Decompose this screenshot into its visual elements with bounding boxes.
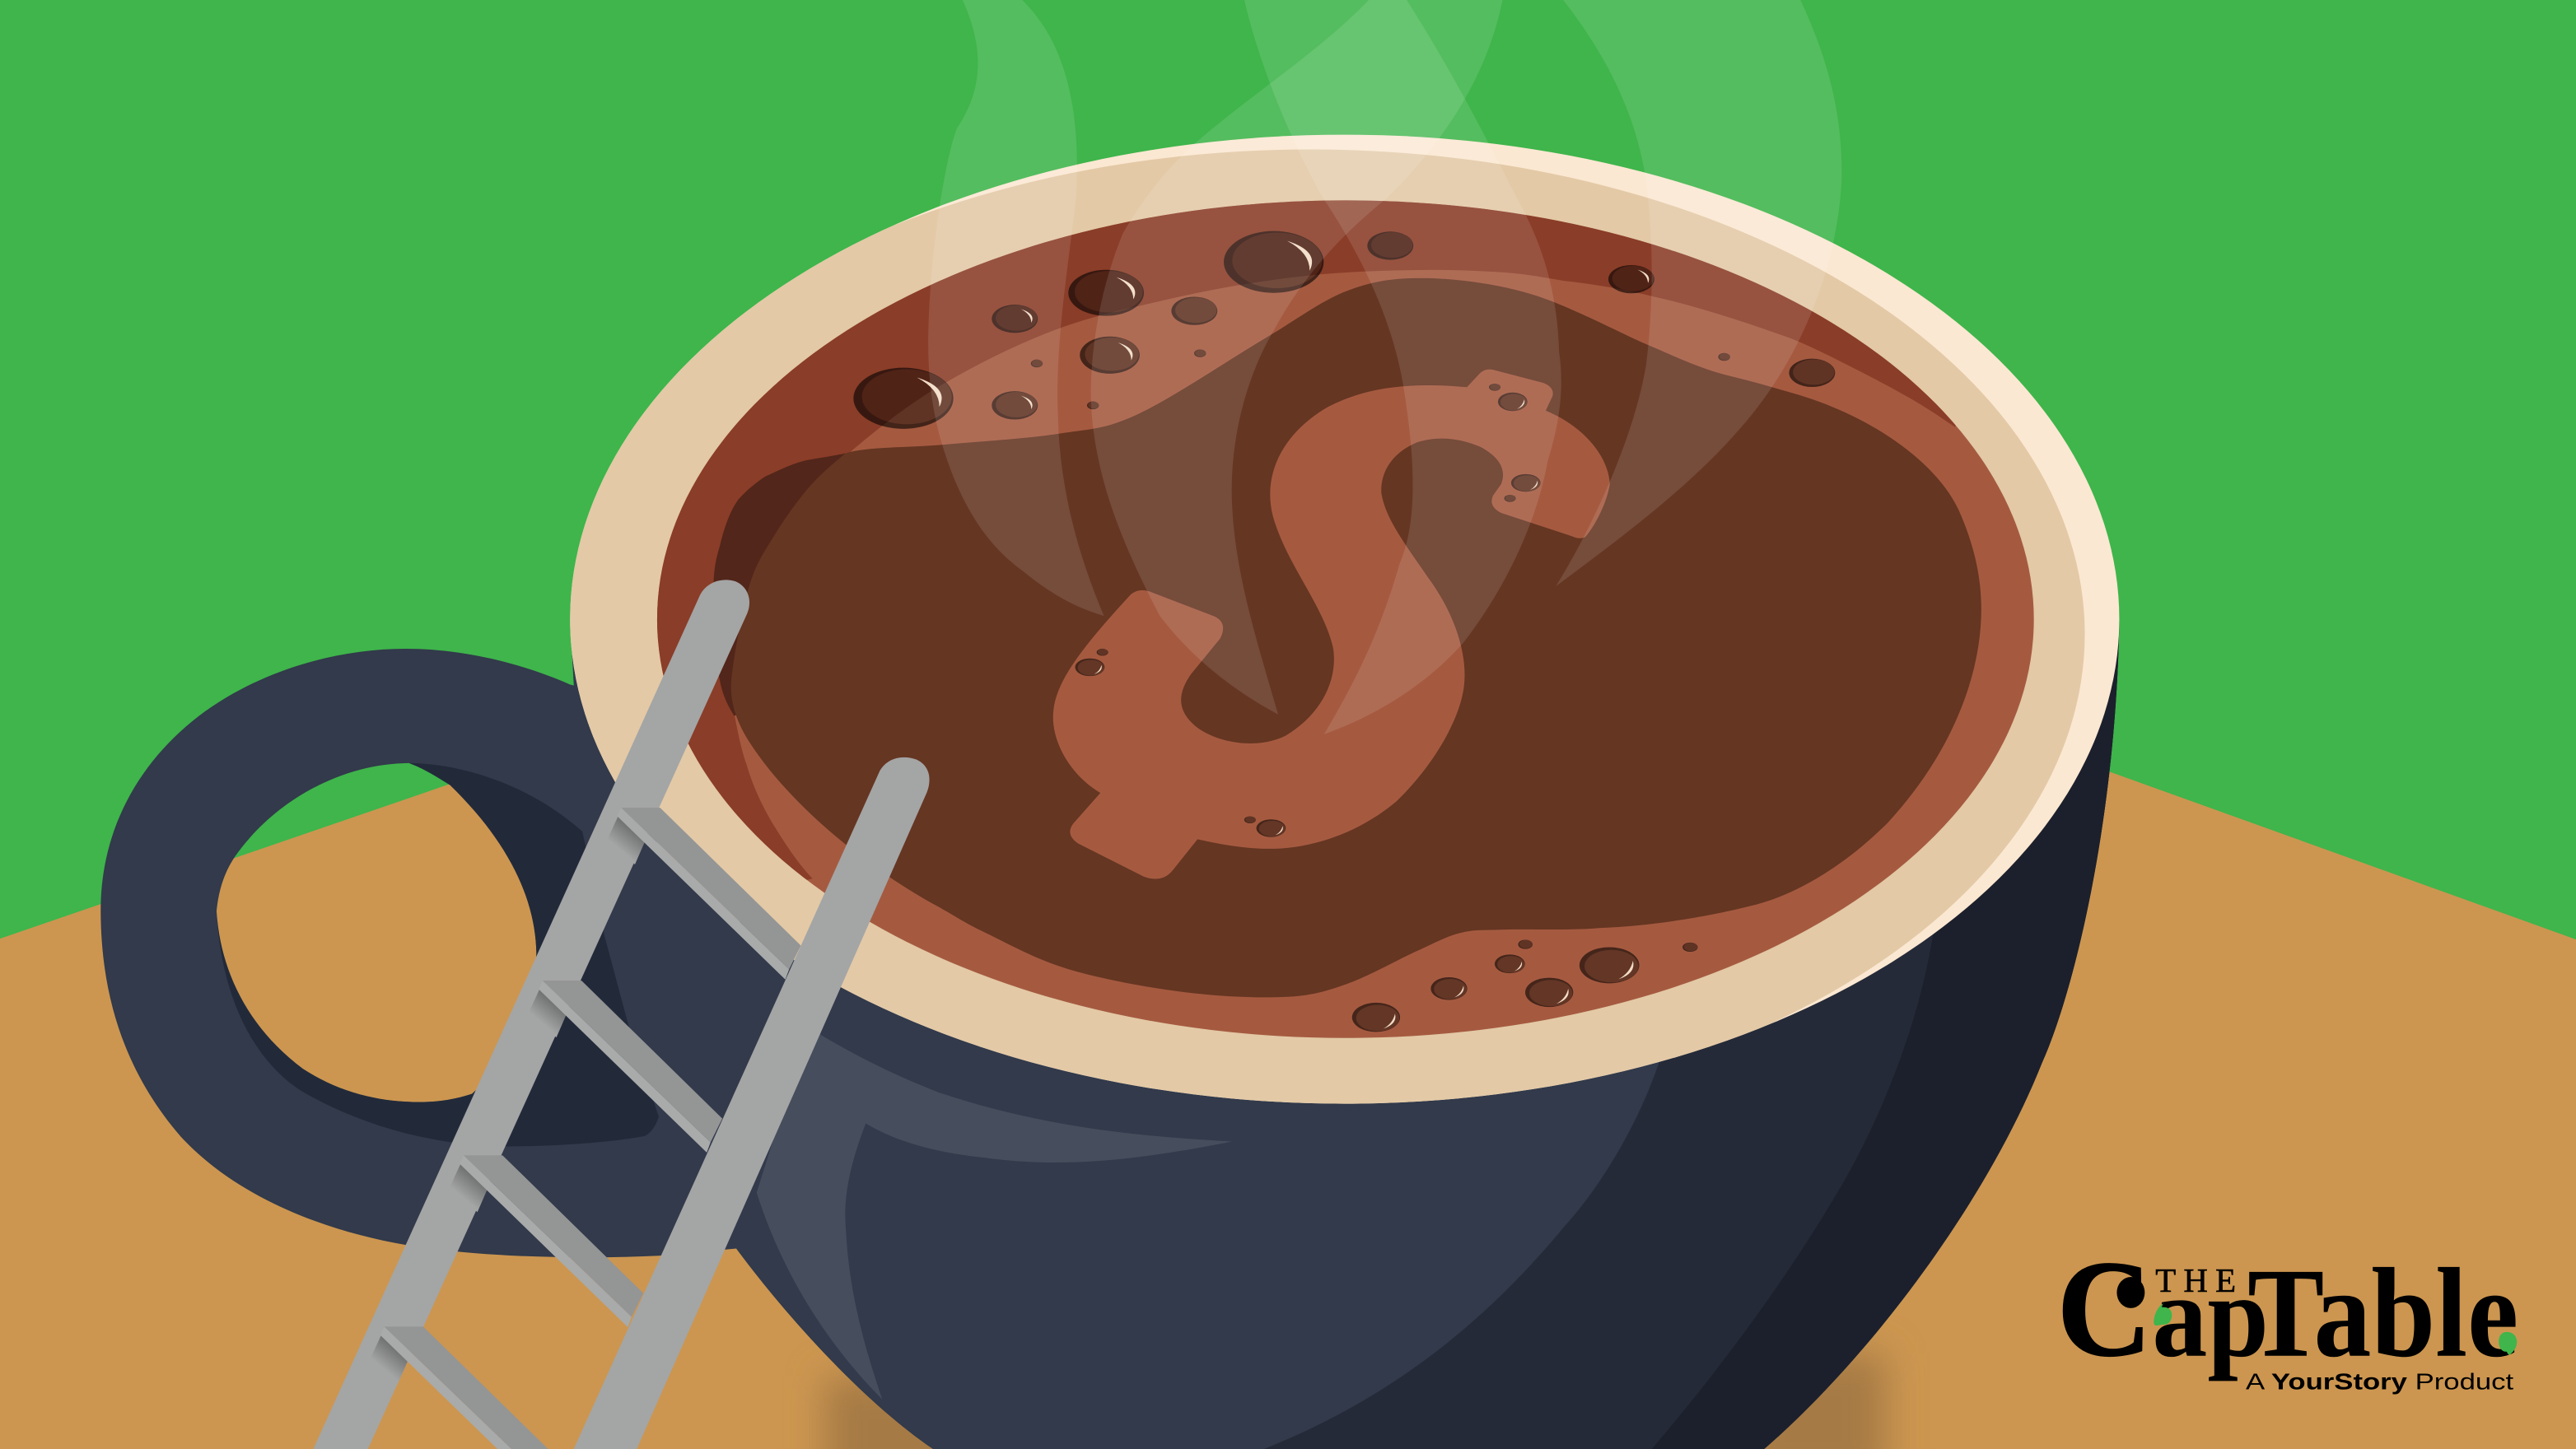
- steam centre right: [1244, 0, 1561, 734]
- cup handle: [100, 649, 821, 1257]
- cup rim inner: [535, 150, 2085, 1119]
- cup body shading: [1257, 624, 2135, 1449]
- dollar shape: [1053, 370, 1610, 879]
- logo wordmark: C: [2057, 1233, 2152, 1386]
- logo green accent upper: [2154, 1303, 2172, 1326]
- bubbles on dollar: [1076, 384, 1541, 837]
- coffee dark centre: [731, 278, 1981, 997]
- coffee dark upper band: [657, 200, 1956, 880]
- table surface: [0, 657, 2576, 1449]
- bubbles at bottom of coffee: [1352, 939, 1698, 1032]
- logo wordmark: ap: [2152, 1251, 2269, 1382]
- dollar sign: [1053, 370, 1610, 879]
- logo small THE: THE: [2155, 1262, 2236, 1299]
- steam wisps: [928, 0, 1841, 734]
- steam left: [928, 0, 1104, 616]
- cup body: [570, 621, 2119, 1449]
- ladder rungs: [371, 808, 800, 1449]
- logo tagline: A YourStory Product: [2246, 1369, 2513, 1395]
- logo: The CapTable, A YourStory Product: [2057, 1233, 2518, 1395]
- ladder: [311, 580, 930, 1449]
- coffee cup: [100, 135, 2135, 1449]
- ladder left rail: [311, 580, 749, 1449]
- cup shadow on table: [824, 1353, 1886, 1449]
- cup highlight: [731, 976, 1232, 1400]
- coffee base: [641, 180, 2054, 1051]
- cup rim outer light: [570, 135, 2119, 1104]
- steam right: [1556, 0, 1841, 586]
- coffee surface: [624, 164, 2070, 1051]
- bubbles at top of coffee: [853, 231, 1835, 429]
- coffee shadow crescent: [712, 454, 846, 716]
- steam centre crossing: [1091, 0, 1503, 715]
- logo wordmark: [2057, 1233, 2518, 1386]
- logo green accent lower: [2499, 1332, 2517, 1355]
- logo wordmark: Table: [2247, 1242, 2518, 1384]
- handle inner shadow: [217, 763, 659, 1146]
- ladder right rail: [572, 757, 930, 1449]
